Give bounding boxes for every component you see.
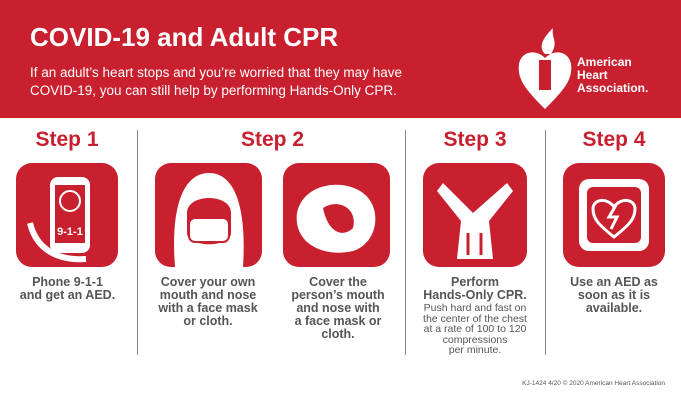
text: step 2b: person’s mouth (291, 288, 385, 302)
text: step 2b: a face mask or (295, 314, 381, 328)
subtitle (30, 65, 402, 98)
icon: face mask self (155, 163, 262, 267)
text: step 3: Push hard and fast on (424, 302, 526, 314)
step 3 heading: Step 3 (443, 128, 507, 151)
logo: Heart (577, 68, 608, 82)
text: step 2a: Cover your own (161, 275, 255, 289)
text: step 3: compressions (443, 334, 507, 346)
text: step 4 (570, 275, 658, 315)
footer: KJ-1424 4/20 © 2020 American Heart Association (522, 380, 665, 387)
text: step 2a: with a face mask (158, 301, 258, 315)
step 1 heading: Step 1 (35, 128, 99, 151)
text: step 3: Hands-Only CPR. (423, 288, 527, 302)
text: step 1: and get an AED. (20, 288, 115, 302)
text: step 2b: cloth. (321, 327, 355, 341)
text: step 3: the center of the chest (423, 312, 527, 324)
icon: phone: 9-1-1 (57, 226, 83, 238)
text: step 2a (158, 275, 258, 328)
text: step 1 (20, 275, 115, 302)
icon: phone (16, 163, 118, 267)
text: step 3: per minute. (449, 344, 501, 356)
text: step 4: available. (586, 301, 642, 315)
text: step 4: Use an AED as (570, 275, 658, 289)
text: step 2b: Cover the (309, 275, 367, 289)
title: COVID-19 and Adult CPR (30, 22, 338, 52)
header banner (0, 0, 681, 118)
icon: mask on person (283, 163, 390, 267)
step 4 heading: Step 4 (582, 128, 646, 151)
icon: AED (563, 163, 665, 267)
text: step 1: Phone 9-1-1 (32, 275, 103, 289)
text: step 2a: or cloth. (183, 314, 233, 328)
step 2 heading: Step 2 (241, 128, 304, 151)
logo: American (577, 55, 632, 69)
text: step 4: soon as it is (578, 288, 650, 302)
subtitle: If an adult’s heart stops and you’re worried that they may have (30, 65, 402, 80)
logo: Association. (577, 81, 648, 95)
text: step 2b: and nose with (296, 301, 380, 315)
text: step 2b (291, 275, 385, 341)
text: step 3 (423, 275, 527, 356)
text: step 3: Perform (451, 275, 499, 289)
subtitle: COVID-19, you can still help by performing Hands-Only CPR. (30, 83, 397, 98)
text: step 3: at a rate of 100 to 120 (424, 323, 526, 335)
icon: hands CPR (423, 163, 527, 267)
logo (518, 28, 648, 109)
text: step 2a: mouth and nose (160, 288, 256, 302)
